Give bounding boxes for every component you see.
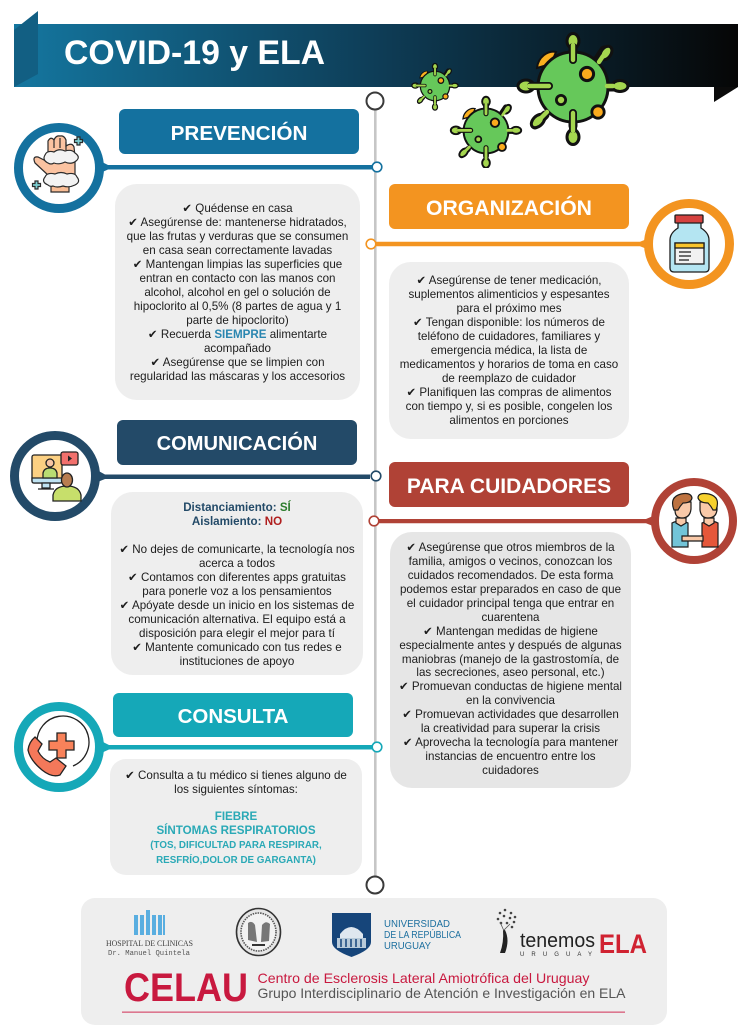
organización heading [389,184,629,229]
timeline [366,92,384,894]
comunicación text: ✔ Mantente comunicado con tus redes e [132,641,342,654]
cuidadores text: ✔ Mantengan medidas de higiene [423,625,598,638]
comunicación text: comunicación alternativa. El equipo está a [128,613,346,626]
logo: hospital de clínicas: Dr. Manuel Quintela [108,950,190,958]
logo: CELAU: CELAU [124,966,248,1010]
cuidadores text: podemos estar preparados en caso de que [400,583,621,596]
comunicación heading: COMUNICACIÓN [157,433,317,455]
organización text: suplementos alimenticios y espesantes [408,288,610,301]
symptoms list: RESFRÍO,DOLOR DE GARGANTA) [156,855,316,866]
cuidadores text: cuidadores [482,764,539,777]
prevención text: ✔ Quédense en casa [182,202,293,215]
organización text: para el próximo mes [456,302,562,315]
prevención text: parte de hipoclorito) [186,314,289,327]
organización text: de reemplazo de cuidador [442,372,576,385]
panel: prevención [14,109,383,400]
comunicación text: ✔ No dejes de comunicarte, la tecnología nos [119,543,355,556]
cuidadores text: ✔ Aprovecha la tecnología para mantener [403,736,618,749]
virus medium [451,97,521,168]
symptoms list [150,810,322,866]
cuidadores text: familia, amigos o vecinos, conozcan los [409,555,612,568]
cuidadores text: ✔ Promuevan conductas de higiene mental [399,680,622,693]
organización text: ✔ Tengan disponible: los números de [413,316,605,329]
distanciamiento status: Distanciamiento: SÍ [183,501,291,514]
icon: medical phone call [14,702,104,792]
prevención connector [104,161,383,173]
consulta text [125,769,347,796]
logo: university seal [236,908,280,956]
consulta heading [113,693,353,737]
logo: CELAU: Grupo Interdisciplinario de Atención e Investigación en ELA [258,985,626,1001]
logo: universidad de la república: DE LA REPÚBLICA [384,928,461,941]
icon: medicine bottle [644,199,734,289]
organización heading: ORGANIZACIÓN [426,197,592,220]
cuidadores text: maniobras (manejo de la gastrostomía, de [402,652,619,666]
cuidadores text: en la convivencia [466,694,555,707]
consulta connector [104,741,383,753]
logo: tenemos ELA: tenemos [520,930,595,952]
cuidadores text: las secreciones, aseo personal, etc.) [416,666,605,679]
panel: comunicación [10,420,382,675]
prevención heading [119,109,359,154]
comunicación text box [111,492,363,675]
comunicación text: instituciones de apoyo [180,655,294,668]
consulta heading: CONSULTA [178,705,288,728]
distanciamiento status: Aislamiento: NO [192,515,282,528]
symptoms list: (TOS, DIFICULTAD PARA RESPIRAR, [150,840,322,851]
prevención text: hipoclorito al 0,5% (8 partes de agua y 1 [134,300,341,313]
logo: universidad de la república: URUGUAY [384,941,431,952]
prevención text: que las frutas y verduras que se consumen [127,230,348,243]
comunicación heading [117,420,357,465]
panel: consulta [14,693,383,875]
cuidadores text: ✔ Promuevan actividades que desarrollen [402,708,619,721]
comunicación text [119,543,355,668]
panel: organización [365,184,734,439]
prevención text: ✔ Recuerda SIEMPRE alimentarte [148,328,327,341]
logo: tenemos ELA: ELA [599,929,647,959]
banner ribbon [14,11,738,102]
virus large [518,34,628,144]
organización text box [389,262,629,439]
prevención text: en casa sean correctamente lavadas [143,244,332,257]
footer logos panel [81,898,667,1025]
icon: video call [10,431,100,521]
prevención text: regularidad las máscaras y los accesorios [130,370,345,383]
comunicación text: acerca a todos [199,557,275,570]
cuidadores text: ✔ Asegúrense que otros miembros de la [406,541,615,554]
cuidadores text: cuarentena [481,611,540,624]
consulta text: ✔ Consulta a tu médico si tienes alguno de [125,769,347,782]
organización text: con tiempo y, si es posible, congelen los [406,400,612,413]
panel: para cuidadores [368,462,737,788]
organización text: emergencia médica, la lista de [431,344,587,357]
viruses illustration [411,32,630,168]
prevención text: ✔ Mantengan limpias las superficies que [133,258,342,271]
consulta text: los siguientes síntomas: [174,783,298,796]
organización text: ✔ Asegúrense de tener medicación, [416,274,602,287]
prevención heading: PREVENCIÓN [171,122,307,145]
symptoms list: FIEBRE [215,810,257,823]
cuidadores heading [389,462,629,507]
logo: universidad de la república [332,913,461,957]
cuidadores text: el cuidador principal tenga que entrar en [407,597,614,610]
logo: tenemos ELA [497,909,647,959]
cuidadores heading: PARA CUIDADORES [407,475,611,498]
logo: CELAU: Centro de Esclerosis Lateral Amiotrófica del Uruguay [258,970,590,986]
prevención text box [115,184,360,400]
cuidadores text [399,541,622,777]
logo: tenemos ELA: URUGUAY [520,952,592,958]
title text: COVID-19 y ELA [64,34,325,72]
icon: two caregivers [651,478,737,564]
prevención text: alcohol, alcohol en gel o solución de [144,286,331,299]
organización text: ✔ Planifiquen las compras de alimentos [406,386,611,399]
prevención text: acompañado [204,342,271,355]
comunicación text: para ponerle voz a los pensamientos [142,585,332,598]
prevención text: entran en contacto con las manos con [140,272,335,285]
comunicación text: ✔ Contamos con diferentes apps gratuitas [128,571,346,584]
cuidadores text: instancias de encuentro entre los [425,750,596,763]
organización connector [365,238,644,250]
organización text: alimentos en porciones [449,414,569,427]
cuidadores text box [390,532,631,788]
logo: hospital de clínicas [106,910,193,958]
title banner [14,11,738,102]
comunicación connector [100,470,382,482]
symptoms list: SÍNTOMAS RESPIRATORIOS [156,824,316,837]
organización text: medicamentos y horarios de toma en caso [400,358,618,371]
cuidadores text: especialmente antes y después de algunas [399,639,622,652]
logo: hospital de clínicas: HOSPITAL DE CLINICAS [106,939,193,948]
virus small [412,64,458,110]
cuidadores text: cuidados recomendados. De esta forma [408,569,613,582]
cuidadores text: la creatividad para superar la crisis [421,722,600,735]
comunicación text: disposición para elegir el mejor para tí [139,627,335,640]
organización text: teléfono de cuidadores, familiares y [418,330,600,343]
organización text [400,274,618,427]
logo: CELAU [122,966,626,1013]
cuidadores connector [368,515,652,527]
distanciamiento status [183,500,291,528]
consulta text box [110,759,362,875]
prevención text: ✔ Asegúrense que se limpien con [150,356,325,369]
icon: washing hands [14,123,104,213]
prevención text: ✔ Asegúrense de: mantenerse hidratados, [128,216,347,229]
logo: universidad de la república: UNIVERSIDAD [384,919,450,930]
prevención text [127,202,348,383]
comunicación text: ✔ Apóyate desde un inicio en los sistemas de [120,599,354,612]
